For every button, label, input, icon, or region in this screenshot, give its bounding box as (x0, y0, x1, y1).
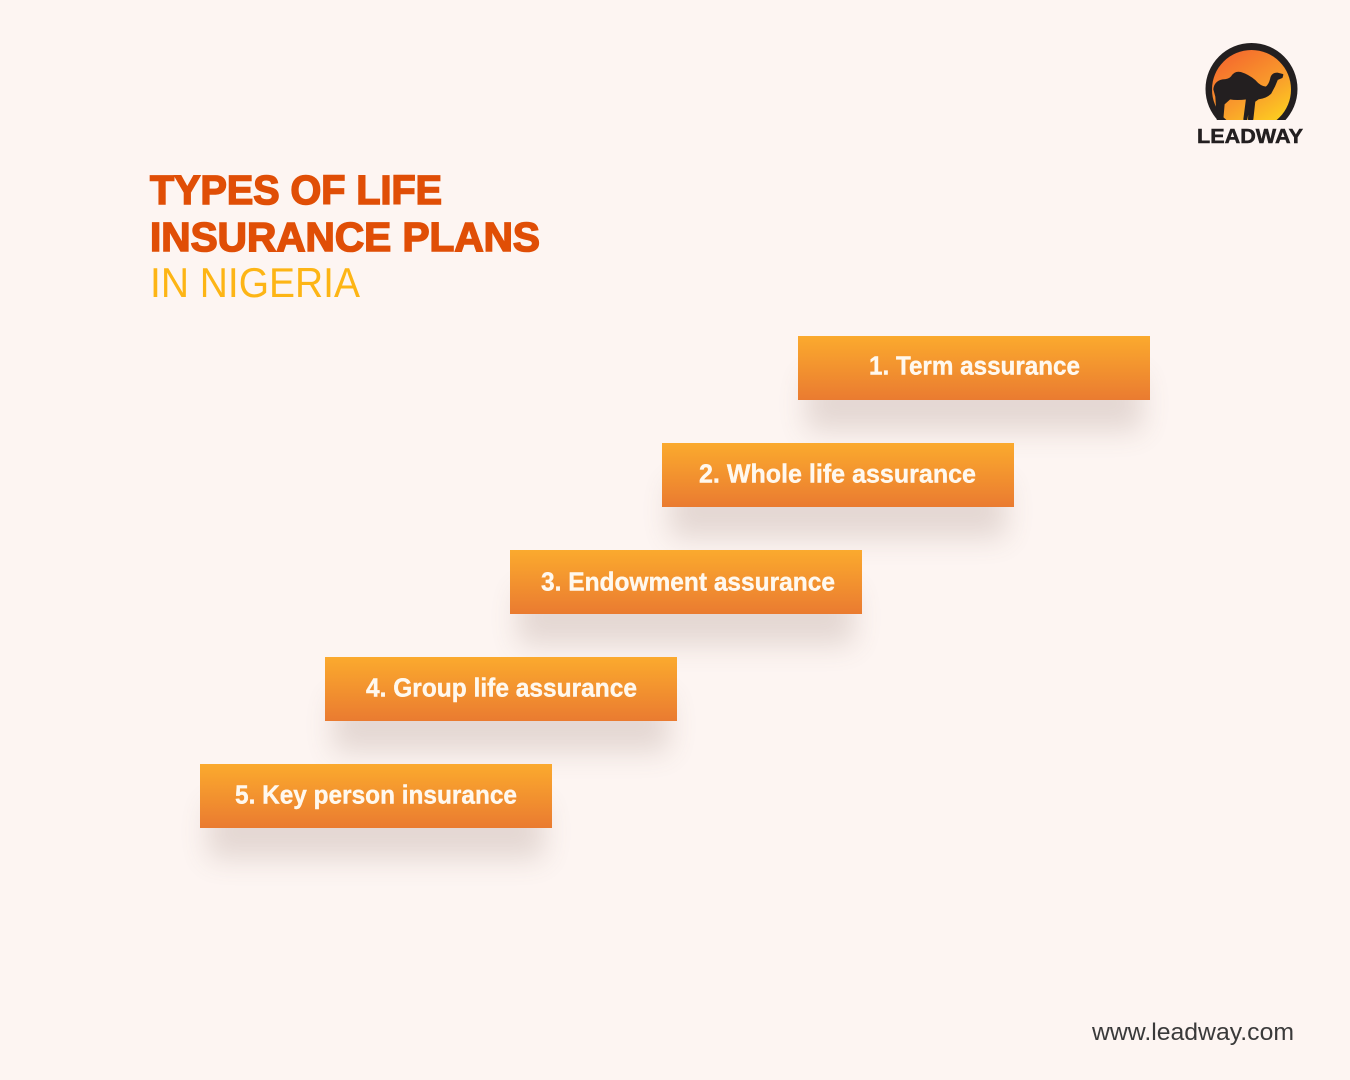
step 5: Key person insurance (200, 764, 552, 859)
step 2: Whole life assurance: 2. Whole life assurance (699, 458, 976, 488)
step 2: Whole life assurance (662, 443, 1014, 538)
step 4: Group life assurance: 4. Group life assurance (366, 672, 637, 702)
title: IN NIGERIA (150, 259, 360, 306)
title: INSURANCE PLANS (150, 214, 540, 260)
step 3: Endowment assurance (510, 550, 862, 645)
title: TYPES OF LIFE (150, 167, 442, 213)
step 5: Key person insurance: 5. Key person insurance (235, 780, 517, 810)
logo: Leadway camel (1197, 43, 1304, 148)
step 1: Term assurance: 1. Term assurance (869, 350, 1080, 380)
website url: www.leadway.com (1091, 1019, 1294, 1046)
step 4: Group life assurance (325, 657, 677, 752)
step 1: Term assurance (798, 336, 1150, 431)
step 3: Endowment assurance: 3. Endowment assurance (541, 566, 835, 596)
logo: Leadway camel: LEADWAY (1197, 126, 1304, 148)
title (150, 167, 540, 306)
